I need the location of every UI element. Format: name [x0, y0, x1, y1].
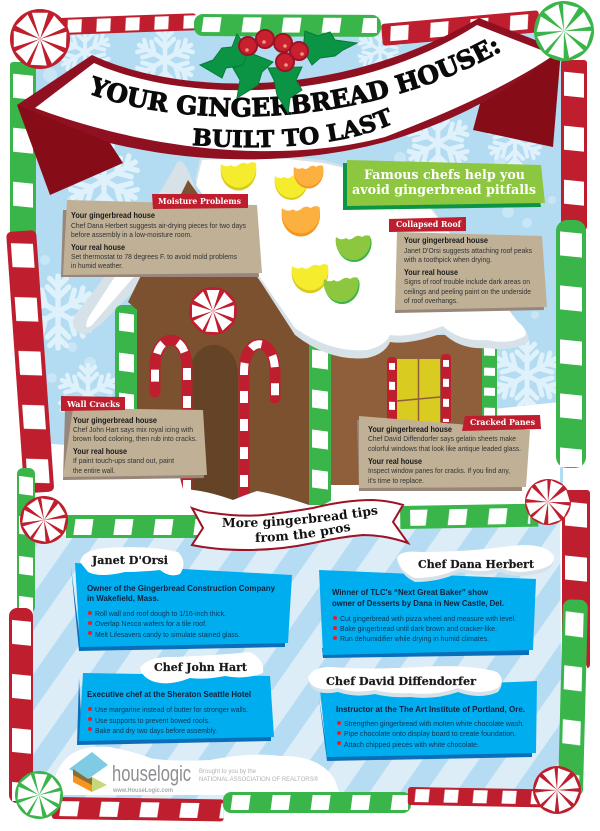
- far right green cane: [482, 343, 497, 428]
- right candy cane: [244, 344, 275, 495]
- details: [87, 689, 251, 735]
- title line 1: YOUR GINGERBREAD HOUSE:: [91, 39, 500, 118]
- text block: [73, 415, 197, 475]
- details: Melt Lifesavers candy to simulate stained glass.: [95, 630, 240, 639]
- striped tips panel: [33, 522, 562, 800]
- sponsor text: [199, 768, 318, 783]
- text block: colorful windows that look like antique leaded glass.: [368, 444, 521, 453]
- text block: with a toothpick when drying.: [403, 255, 492, 264]
- left candy cane: [155, 340, 187, 492]
- roof snow: [195, 155, 528, 359]
- details: owner of Desserts by Dana in New Castle, Del.: [332, 598, 504, 608]
- details: Roll wall and roof dough to 1/16-inch thick.: [95, 609, 226, 618]
- ribbon line 2: from the pros: [255, 524, 350, 542]
- details: Bake gingerbread until dark brown and cracker-like.: [340, 624, 497, 633]
- text block: Signs of roof trouble include dark areas on: [404, 277, 530, 286]
- text block: it's time to replace.: [368, 476, 424, 485]
- text block: Your gingerbread house: [71, 210, 155, 220]
- text block: [368, 424, 521, 485]
- tag: Collapsed Roof: [396, 220, 462, 230]
- details: Bake and dry two days before assembly.: [95, 726, 217, 735]
- details: [336, 704, 525, 749]
- tag: [389, 217, 466, 232]
- text block: Chef David Diffendorfer says gelatin sheets make: [368, 434, 516, 443]
- left eave snow: [73, 161, 178, 335]
- panel: collapsed roof: [389, 217, 547, 313]
- text block: ceilings and peeling paint on the underside: [404, 287, 531, 296]
- door: [190, 345, 238, 500]
- text block: [403, 235, 532, 305]
- apex snow cone: [165, 161, 203, 215]
- details: Strengthen gingerbread with molten white chocolate wash.: [344, 719, 524, 728]
- snow header: [397, 545, 554, 582]
- tag: Moisture Problems: [158, 197, 241, 207]
- name: Chef David Diffendorfer: [326, 675, 476, 688]
- text block: before assembly in a low-moisture room.: [71, 230, 192, 239]
- right green cane: [309, 342, 331, 507]
- panel: cracked panes: [357, 415, 541, 491]
- panel: wall cracks: [61, 396, 207, 480]
- logo url: www.HouseLogic.com: [112, 788, 173, 794]
- green bands beside lower ribbon: [66, 504, 538, 538]
- peppermint: [189, 287, 237, 335]
- logo mark: [69, 752, 108, 792]
- name: Janet D'Orsi: [91, 554, 168, 567]
- roof candies: [221, 162, 372, 304]
- ground snow: [100, 478, 530, 512]
- text block: If paint touch-ups stand out, paint: [73, 456, 174, 465]
- frame peppermints: top: [10, 0, 596, 69]
- left house cane: [115, 305, 137, 475]
- details: in Wakefield, Mass.: [87, 593, 159, 603]
- sponsor text: Brought to you by the: [199, 768, 256, 775]
- snow header: [140, 652, 263, 683]
- text block: Chef John Hart says mix royal icing with: [73, 425, 193, 434]
- details: Pipe chocolate onto display board to create foundation.: [344, 729, 516, 738]
- tag: [462, 415, 541, 431]
- text block: Chef Dana Herbert suggests air-drying pieces for two days: [71, 221, 246, 230]
- lower peppermints: [15, 474, 584, 819]
- details: Owner of the Gingerbread Construction Company: [87, 583, 275, 593]
- text block: of roof overhangs.: [404, 296, 458, 305]
- name: Chef John Hart: [154, 661, 248, 674]
- text block: in humid weather.: [71, 261, 123, 270]
- details: Use supports to prevent bowed roofs.: [95, 716, 210, 725]
- text block: Your real house: [404, 267, 458, 277]
- green heading: famous chefs: [343, 160, 545, 210]
- ribbon banner with title: [17, 18, 560, 195]
- text block: Your gingerbread house: [368, 424, 452, 434]
- text block: brown food coloring, then rub into cracks.: [73, 434, 197, 443]
- panel: Chef Dana Herbert: [315, 545, 554, 658]
- icon: holly and berries: [200, 30, 357, 113]
- text block: Inspect window panes for cracks. If you find any,: [368, 466, 510, 475]
- details: Run dehumidifier while drying in humid climates.: [340, 634, 489, 643]
- heading line 1: Famous chefs help you: [364, 168, 525, 183]
- details: [87, 583, 275, 639]
- window: [387, 354, 451, 424]
- sponsor text: NATIONAL ASSOCIATION OF REALTORS®: [199, 775, 318, 783]
- text block: Set thermostat to 78 degrees F. to avoid mold problems: [71, 252, 237, 261]
- panel: Janet D'Orsi: [71, 547, 292, 651]
- ribbon: more gingerbread tips: [190, 499, 410, 551]
- details: Executive chef at the Sheraton Seattle Hotel: [87, 689, 251, 699]
- tag: Cracked Panes: [470, 418, 535, 428]
- details: Attach chipped pieces with white chocolate.: [344, 740, 479, 749]
- details: Overlap Necco wafers for a tile roof.: [95, 619, 207, 628]
- text block: Your real house: [73, 446, 127, 456]
- details: Instructor at the The Art Institute of Portland, Ore.: [336, 704, 525, 714]
- name: Chef Dana Herbert: [418, 558, 535, 571]
- sky background: [21, 26, 563, 530]
- gable wall: [128, 180, 330, 505]
- heading line 2: avoid gingerbread pitfalls: [352, 183, 536, 198]
- details: Winner of TLC's “Next Great Baker” show: [332, 587, 488, 597]
- text block: Janet D'Orsi suggests attaching roof peaks: [404, 246, 532, 255]
- logo wordmark: houselogic: [112, 761, 191, 786]
- panel: Chef John Hart: [77, 652, 274, 745]
- text block: Your real house: [71, 242, 125, 252]
- panel: Chef David Diffendorfer: [308, 666, 537, 761]
- text block: the entire wall.: [73, 466, 115, 475]
- tag: [152, 194, 248, 209]
- text block: Your gingerbread house: [73, 415, 157, 425]
- text block: Your gingerbread house: [404, 235, 488, 245]
- snow header: [308, 666, 502, 698]
- tag: Wall Cracks: [66, 400, 120, 410]
- snow header: [80, 547, 184, 575]
- details: Use margarine instead of butter for stronger walls.: [95, 705, 248, 714]
- text block: Your real house: [368, 456, 422, 466]
- logo: HouseLogic: [69, 752, 318, 794]
- right wall: [310, 335, 485, 485]
- details: Cut gingerbread with pizza wheel and measure with level.: [340, 614, 516, 623]
- gingerbread house: [73, 155, 530, 512]
- details: [332, 587, 516, 643]
- ribbon line 1: More gingerbread tips: [222, 507, 378, 529]
- panel: moisture problems: [61, 194, 262, 277]
- tag: [61, 396, 125, 411]
- snow footer: [53, 747, 340, 795]
- text block: [71, 210, 246, 270]
- title line 2: BUILT TO LAST: [192, 107, 391, 148]
